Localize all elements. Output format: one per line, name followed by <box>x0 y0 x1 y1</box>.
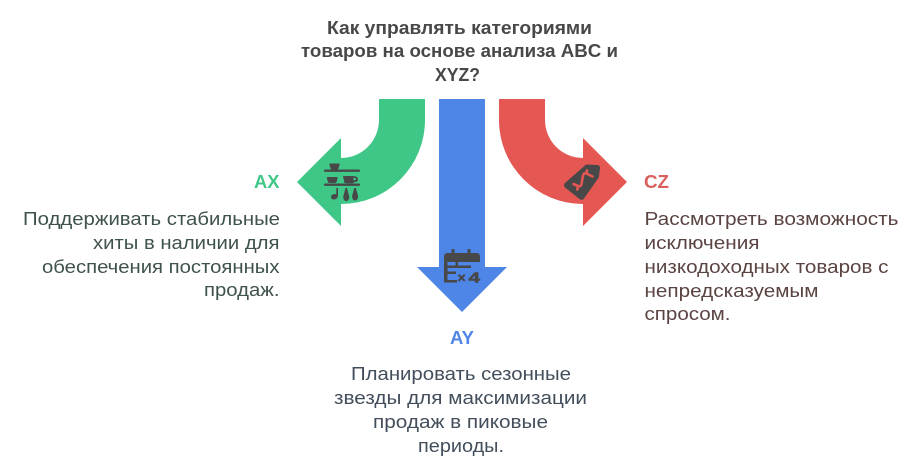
title <box>301 18 618 85</box>
text block: AY description <box>334 364 587 456</box>
arrow: AX green <box>297 99 425 226</box>
text block: AX description <box>23 209 280 300</box>
text block: AY description: периоды. <box>418 436 504 456</box>
title: XYZ? <box>435 65 480 85</box>
icon: calendar x4: 4 <box>468 270 481 286</box>
text block: CZ description: низкодоходных товаров с <box>644 257 888 277</box>
text block: AX description: обеспечения постоянных <box>42 257 280 277</box>
label: AY: AY <box>450 328 474 348</box>
label: CZ: CZ <box>644 172 669 192</box>
text block: AY description: звезды для максимизации <box>334 388 587 408</box>
text block: AX description: хиты в наличии для <box>93 233 280 253</box>
text block: CZ description: Рассмотреть возможность <box>644 209 898 229</box>
text block: CZ description <box>644 209 898 324</box>
text block: AX description: продаж. <box>204 280 280 300</box>
icon: calendar x4: × <box>458 270 466 286</box>
title: товаров на основе анализа ABC и <box>301 41 618 61</box>
arrow: AY blue <box>417 99 507 312</box>
icon: price tag with dollar <box>564 164 600 200</box>
text block: AX description: Поддерживать стабильные <box>23 209 280 229</box>
arrow: CZ red <box>499 99 627 226</box>
label: AX: AX <box>254 172 280 192</box>
text block: AY description: продаж в пиковые <box>373 412 548 432</box>
icon: calendar x4 <box>444 249 481 286</box>
title: Как управлять категориями <box>327 18 592 38</box>
text block: CZ description: исключения <box>644 233 760 253</box>
icon: shelf with cups and spoons <box>324 164 360 201</box>
text block: CZ description: спросом. <box>644 304 730 324</box>
text block: CZ description: непредсказуемым <box>644 281 818 301</box>
text block: AY description: Планировать сезонные <box>351 364 571 384</box>
